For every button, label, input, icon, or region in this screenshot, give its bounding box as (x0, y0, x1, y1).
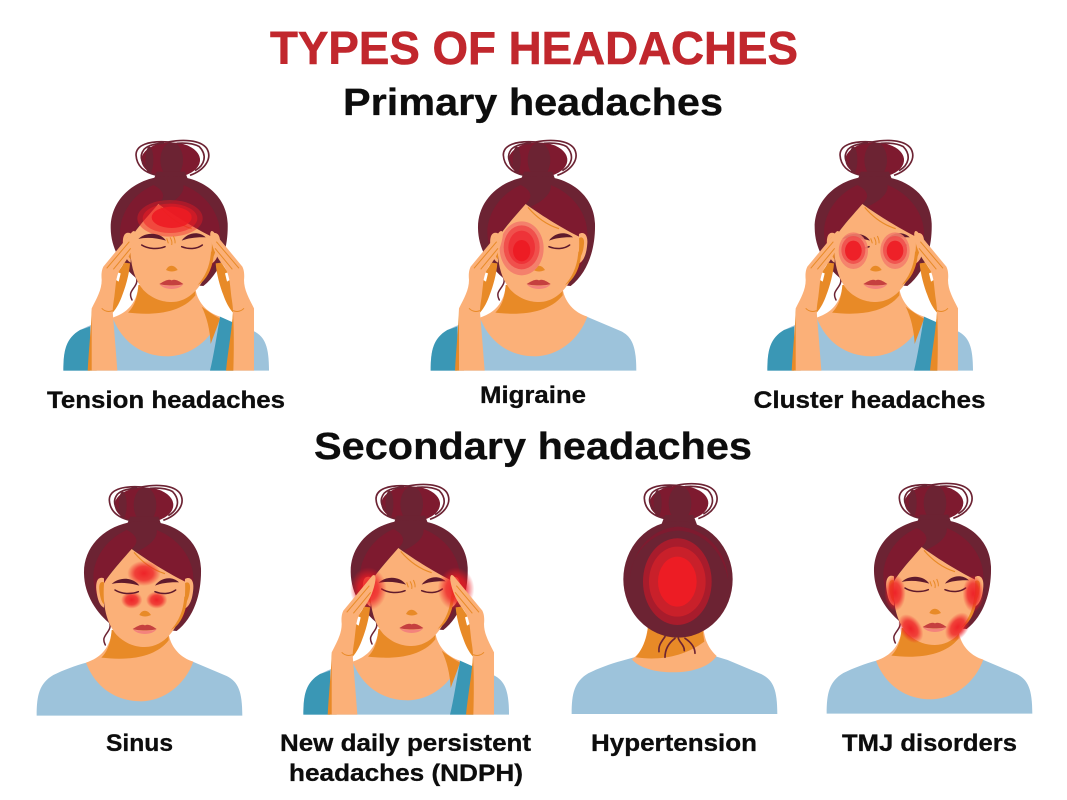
title: TYPES OF HEADACHES (270, 22, 798, 74)
heading: primary headaches: Primary headaches (343, 82, 723, 124)
heat: forehead band (137, 200, 203, 237)
heat: around both eyes (839, 232, 910, 269)
label: migraine: Migraine (480, 382, 586, 409)
label: tension headaches: Tension headaches (47, 387, 285, 414)
label: sinus: Sinus (106, 730, 173, 757)
label: TMJ disorders: TMJ disorders (842, 730, 1017, 757)
figure: TMJ disorders (827, 483, 1032, 714)
label: new daily persistent headaches (NDPH) (280, 730, 531, 787)
heat: back of the head (643, 538, 712, 625)
label: cluster headaches: Cluster headaches (754, 387, 986, 414)
figure: migraine (431, 140, 636, 371)
figure: sinus (37, 485, 242, 716)
heat: jaw and ears (884, 575, 984, 648)
label: hypertension: Hypertension (591, 730, 757, 757)
figure: new daily persistent headaches (303, 484, 509, 715)
heading: secondary headaches: Secondary headaches (314, 426, 752, 468)
figure: hypertension, back of head (572, 484, 777, 714)
heat: sinus points (121, 561, 167, 609)
label: new daily persistent headaches (NDPH): headaches (NDPH) (289, 760, 523, 787)
figure: cluster headaches (767, 140, 973, 371)
heat: one side of the face (500, 221, 544, 275)
figure: tension headaches (63, 140, 269, 371)
label: new daily persistent headaches (NDPH): New daily persistent (280, 730, 531, 757)
heat: temples (350, 567, 474, 611)
